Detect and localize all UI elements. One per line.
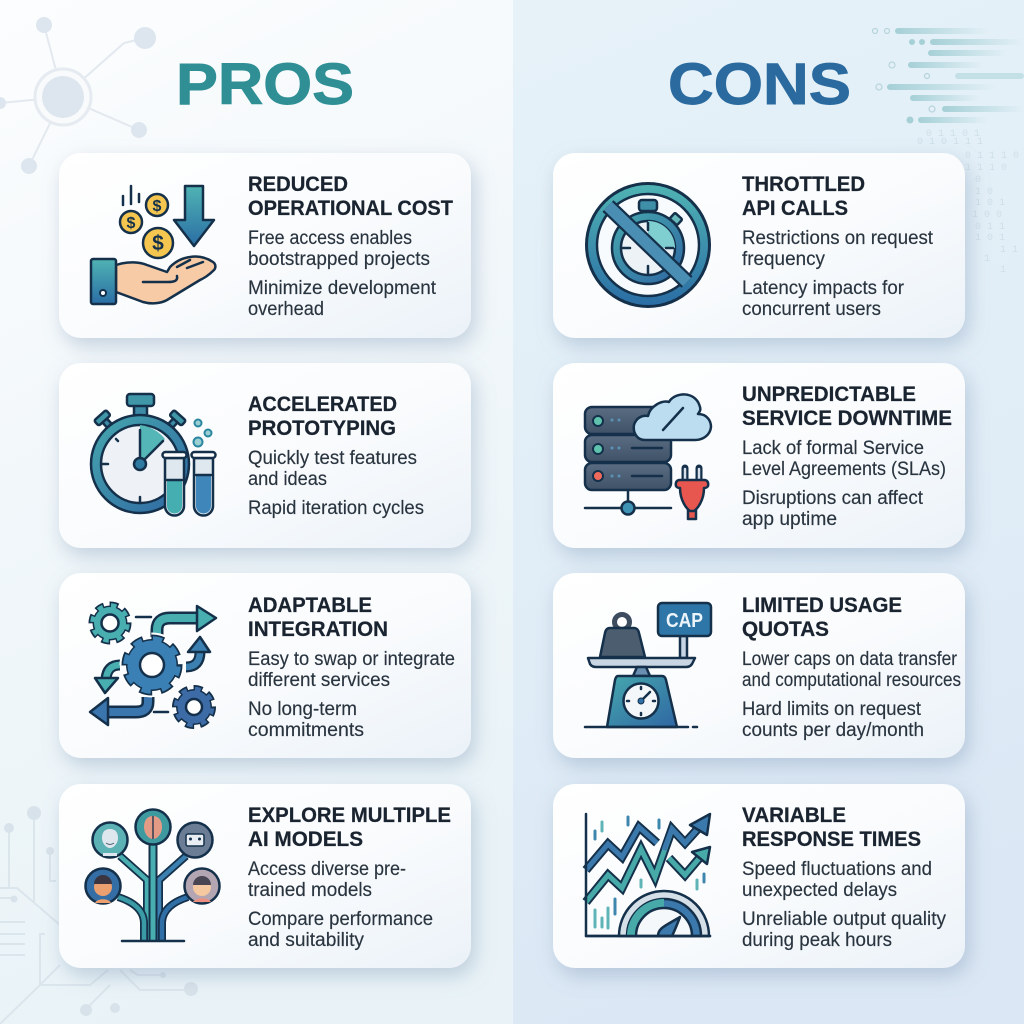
heading: reduced operational cost: OPERATIONAL COST: [248, 196, 453, 220]
decoration: binary digits: 1 0 0: [972, 210, 1002, 221]
decoration: binary digits: [917, 129, 1019, 276]
icon: server, cloud and plug: [585, 394, 711, 519]
decoration: data lines top right: [872, 28, 1024, 124]
heading: unpredictable service downtime: SERVICE DOWNTIME: [742, 406, 952, 430]
text block: limited usage quotas details: and computational resources: [742, 670, 961, 691]
decoration: binary digits: 1 1: [1000, 245, 1018, 256]
icon: tree of AI model avatars: [86, 810, 220, 941]
title: PROS: PROS: [176, 52, 354, 117]
heading: accelerated prototyping: ACCELERATED: [248, 392, 397, 416]
decoration: binary digits: 0 1 1: [975, 222, 1005, 233]
text block: throttled API calls details: Latency impacts for: [742, 278, 905, 299]
decoration: binary digits: 1 0 1: [975, 198, 1005, 209]
text block: limited usage quotas details: [742, 649, 961, 741]
heading: adaptable integration: INTEGRATION: [248, 617, 388, 641]
decoration: binary digits: 1: [1000, 265, 1006, 276]
decoration: circuit traces bottom left: [0, 806, 198, 1024]
text block: variable response times details: Unreliable output quality: [742, 909, 946, 930]
left panel background: [0, 0, 513, 1024]
text block: throttled API calls details: frequency: [742, 249, 825, 270]
text block: unpredictable service downtime details: Lack of formal Service: [742, 438, 924, 459]
text block: limited usage quotas details: counts per day/month: [742, 720, 924, 741]
text block: limited usage quotas details: Lower caps on data transfer: [742, 649, 958, 670]
text block: throttled API calls details: Restrictions on request: [742, 228, 934, 249]
text block: limited usage quotas details: Hard limits on request: [742, 699, 922, 720]
text block: accelerated prototyping details: Rapid iteration cycles: [248, 498, 424, 519]
decoration: binary digits: 1 0: [975, 187, 993, 198]
text block: variable response times details: unexpected delays: [742, 880, 897, 901]
text block: variable response times details: Speed fluctuations and: [742, 859, 932, 880]
text block: variable response times details: [742, 859, 946, 951]
decoration: binary digits: 0 1 0 1 1 1: [917, 137, 983, 148]
icon: stopwatch and test tubes: [91, 394, 216, 516]
heading: unpredictable service downtime: UNPREDICTABLE: [742, 382, 916, 406]
heading: accelerated prototyping: PROTOTYPING: [248, 416, 396, 440]
icon: hand with coins and down arrow: $: [152, 232, 164, 255]
text block: unpredictable service downtime details: Level Agreements (SLAs): [742, 459, 946, 480]
text block: explore multiple AI models details: trained models: [248, 880, 372, 901]
text block: adaptable integration details: [248, 649, 455, 741]
text block: variable response times details: during peak hours: [742, 930, 892, 951]
text block: accelerated prototyping details: Quickly test features: [248, 448, 417, 469]
heading: throttled API calls: [742, 172, 865, 220]
text block: reduced operational cost details: overhead: [248, 299, 324, 320]
panel: reduced operational cost: [59, 153, 471, 338]
text block: adaptable integration details: No long-term: [248, 699, 357, 720]
icon part: small teal gear: [92, 606, 128, 640]
text block: accelerated prototyping details: and ideas: [248, 469, 327, 490]
panel: explore multiple AI models: [59, 784, 471, 968]
panel: limited usage quotas: [553, 573, 965, 758]
heading: accelerated prototyping: [248, 392, 397, 440]
text block: unpredictable service downtime details: Disruptions can affect: [742, 488, 924, 509]
text block: unpredictable service downtime details: app uptime: [742, 509, 837, 530]
heading: adaptable integration: [248, 593, 388, 641]
heading: explore multiple AI models: AI MODELS: [248, 827, 363, 851]
icon: hand with coins and down arrow: [91, 186, 215, 304]
panel: accelerated prototyping: [59, 363, 471, 548]
icon part: small blue gear: [176, 689, 212, 725]
heading: limited usage quotas: QUOTAS: [742, 617, 829, 641]
icon: weight scale with CAP sign: CAP: [666, 610, 703, 632]
heading: limited usage quotas: [742, 593, 902, 641]
text block: explore multiple AI models details: and suitability: [248, 930, 365, 951]
decoration: binary digits: 1 1 1 0: [965, 163, 1007, 174]
title: CONS: CONS: [668, 52, 851, 117]
heading: reduced operational cost: REDUCED: [248, 172, 348, 196]
heading: variable response times: [742, 803, 921, 851]
panel: adaptable integration: [59, 573, 471, 758]
text block: throttled API calls details: [742, 228, 934, 320]
heading: explore multiple AI models: EXPLORE MULTIPLE: [248, 803, 451, 827]
decoration: molecule network top left: [0, 17, 156, 174]
heading: throttled API calls: API CALLS: [742, 196, 848, 220]
icon: weight scale with CAP sign: [585, 603, 711, 727]
decoration: binary digits: 1: [984, 254, 990, 265]
heading: variable response times: VARIABLE: [742, 803, 846, 827]
heading: variable response times: RESPONSE TIMES: [742, 827, 921, 851]
icon: prohibited stopwatch: [585, 182, 711, 308]
decoration: binary digits: 0: [975, 175, 981, 186]
text block: throttled API calls details: concurrent users: [742, 299, 881, 320]
icon: hand with coins and down arrow: $: [153, 198, 162, 215]
heading: explore multiple AI models: [248, 803, 451, 851]
text block: reduced operational cost details: Minimize development: [248, 278, 437, 299]
icon part: large blue gear: [126, 639, 178, 691]
text block: accelerated prototyping details: [248, 448, 424, 519]
text block: adaptable integration details: Easy to swap or integrate: [248, 649, 455, 670]
text block: explore multiple AI models details: [248, 859, 433, 951]
text block: adaptable integration details: commitments: [248, 720, 364, 741]
decoration: binary digits: 0 1 1 0 1: [926, 129, 980, 140]
heading: limited usage quotas: LIMITED USAGE: [742, 593, 902, 617]
heading: unpredictable service downtime: [742, 382, 952, 430]
panel: variable response times: [553, 784, 965, 968]
text block: reduced operational cost details: [248, 228, 437, 320]
icon: hand with coins and down arrow: $: [127, 215, 136, 232]
text block: adaptable integration details: different services: [248, 670, 390, 691]
decoration: binary digits: 1 0 1: [975, 233, 1005, 244]
panel: throttled API calls: [553, 153, 965, 338]
text block: unpredictable service downtime details: [742, 438, 946, 530]
heading: reduced operational cost: [248, 172, 453, 220]
text block: explore multiple AI models details: Compare performance: [248, 909, 433, 930]
text block: explore multiple AI models details: Access diverse pre-: [248, 859, 406, 880]
icon: gears and arrows: [90, 606, 216, 725]
icon: volatile chart and gauge: [586, 814, 710, 936]
text block: reduced operational cost details: bootstrapped projects: [248, 249, 430, 270]
text block: reduced operational cost details: Free access enables: [248, 228, 412, 249]
heading: throttled API calls: THROTTLED: [742, 172, 865, 196]
panel: unpredictable service downtime: [553, 363, 965, 548]
right panel background: [513, 0, 1024, 1024]
decoration: binary digits: 0 1 1 1 0: [965, 151, 1019, 162]
heading: adaptable integration: ADAPTABLE: [248, 593, 372, 617]
